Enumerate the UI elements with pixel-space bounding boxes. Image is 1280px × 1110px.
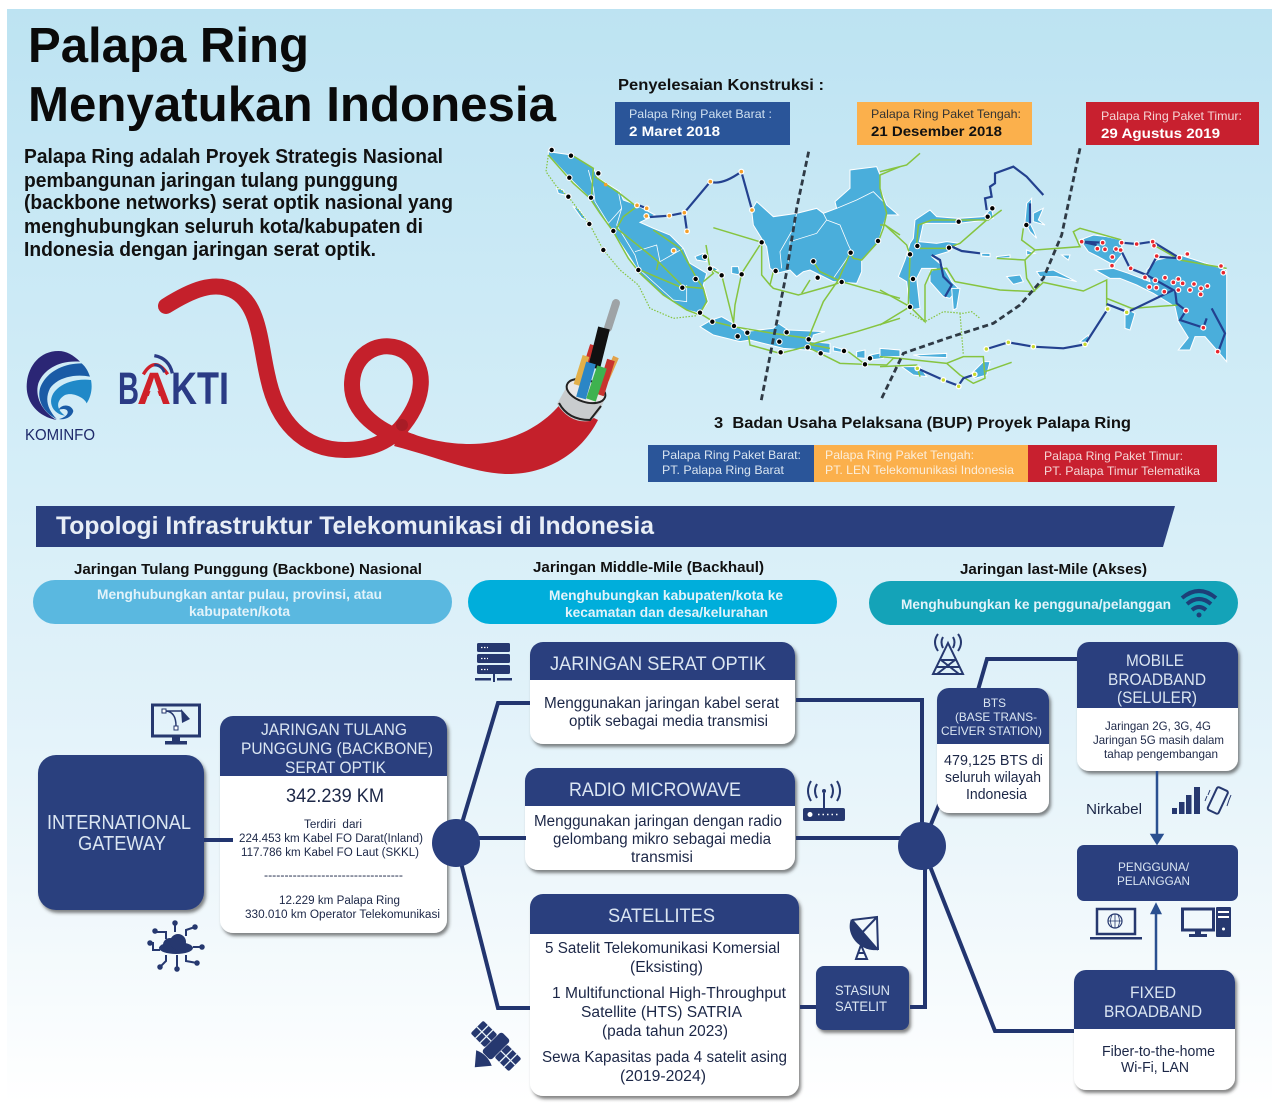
logo: Kominfo: KOMINFO [25,427,95,444]
box: satellite station: STASIUN [835,982,890,998]
heading: three implementing companies: 3 Badan Usaha Pelaksana (BUP) Proyek Palapa Ring [714,415,1131,432]
box: fixed broadband: Wi-Fi, LAN [1121,1060,1189,1076]
box: satellites: SATELLITES [608,906,715,927]
box: user [1077,845,1238,901]
box: mobile broadband: (SELULER) [1117,688,1197,707]
box: BTS [937,688,1049,813]
box: radio microwave: RADIO MICROWAVE [569,780,741,801]
icon: vibrating phone [1205,787,1231,814]
box: user: PENGGUNA/ [1118,860,1190,874]
completion box: west package [615,102,790,145]
box: backbone fibre: JARINGAN TULANG [261,720,407,739]
box: mobile broadband: BROADBAND [1108,670,1206,689]
arrow: fixed broadband to user [1152,905,1160,970]
box: fibre optic network [530,642,795,744]
logo: BAKTI [118,356,229,414]
box: backbone fibre: PUNGGUNG (BACKBONE) [241,739,433,758]
icon: cell tower [933,634,963,674]
column: backbone: kabupaten/kota [189,603,290,619]
BUP box: west: PT. Palapa Ring Barat [662,463,785,477]
box: BTS: Indonesia [966,787,1028,803]
box: fixed broadband: FIXED [1130,983,1176,1002]
BUP box: east: PT. Palapa Timur Telematika [1044,464,1200,478]
completion box: east package: Palapa Ring Paket Timur: [1101,109,1242,123]
icon: satellite [456,1017,525,1086]
box: mobile broadband [1077,642,1238,771]
box: fibre optic network: optik sebagai media transmisi [569,713,768,730]
BUP box: west [648,445,814,482]
box: BTS: 479,125 BTS di [944,753,1043,769]
box: BTS: BTS [983,696,1006,710]
connector lines [456,659,1077,1031]
box: satellites [530,894,799,1096]
box: international gateway: GATEWAY [78,833,166,855]
box: fixed broadband [1074,970,1235,1090]
section banner: Topologi Infrastruktur Telekomunikasi di Indonesia [56,512,655,540]
title: Palapa Ring [28,19,309,73]
box: backbone fibre: 224.453 km Kabel FO Darat(Inland) [239,833,423,845]
logo: BAKTI: B [118,363,139,414]
column: backbone [33,561,452,624]
intro paragraph: (backbone networks) serat optik nasional yang [24,192,453,214]
BUP box: east [1028,445,1217,482]
intro paragraph: Palapa Ring adalah Proyek Strategis Nasional [24,146,443,168]
box: satellites: (pada tahun 2023) [602,1023,728,1040]
column: last-mile: Menghubungkan ke pengguna/pelanggan [901,596,1171,612]
box: radio microwave: Menggunakan jaringan dengan radio [534,813,782,830]
box: backbone fibre: 330.010 km Operator Telekomunikasi [245,909,440,921]
arrow: mobile broadband to user [1152,771,1162,843]
box: satellites: 5 Satelit Telekomunikasi Komersial [545,940,780,957]
icon: wifi router [803,781,845,821]
icon: satellite dish [850,917,878,959]
icon: desktop computer [1182,907,1231,937]
box: international gateway [38,755,204,910]
fibre optic cable illustration [166,286,616,474]
box: backbone fibre: 117.786 km Kabel FO Laut (SKKL) [241,847,419,859]
column: middle-mile: Menghubungkan kabupaten/kota ke [549,587,783,603]
box: international gateway: INTERNATIONAL [47,812,191,834]
box: mobile broadband: Jaringan 5G masih dalam [1093,733,1224,747]
logo: BAKTI: KTI [171,363,229,414]
box: mobile broadband: tahap pengembangan [1104,747,1218,761]
box: fixed broadband: BROADBAND [1104,1002,1202,1021]
hub: backbone [432,819,480,867]
box: backbone fibre: 12.229 km Palapa Ring [279,895,400,907]
box: fibre optic network: Menggunakan jaringan kabel serat [544,695,780,712]
icon: monitor with vector tool [152,705,200,744]
BUP box: east: Palapa Ring Paket Timur: [1044,449,1183,463]
BUP box: central [814,445,1028,482]
box: backbone fibre: 342.239 KM [286,786,384,807]
BUP box: central: PT. LEN Telekomunikasi Indonesia [825,463,1014,477]
box: satellites: Satellite (HTS) SATRIA [581,1004,743,1021]
box: backbone fibre: Terdiri dari [304,819,362,831]
completion box: central package: Palapa Ring Paket Tengah: [871,107,1021,121]
heading: construction completion: Penyelesaian Konstruksi : [618,77,824,94]
box: satellites: (Eksisting) [630,959,703,976]
connector: gateway to backbone [204,838,233,842]
logo: Kominfo [25,351,95,444]
completion box: west package: Palapa Ring Paket Barat : [629,107,772,121]
map of Indonesia with Palapa Ring network [546,148,1227,403]
title: Menyatukan Indonesia [28,78,557,132]
completion box: east package [1086,102,1259,145]
column: middle-mile: kecamatan dan desa/kelurahan [565,604,768,620]
intro paragraph: pembangunan jaringan tulang punggung [24,170,398,192]
box: backbone fibre [220,716,447,933]
completion box: central package: 21 Desember 2018 [871,123,1002,139]
column: middle-mile [468,559,837,624]
box: radio microwave: transmisi [631,849,693,866]
box: satellites: (2019-2024) [620,1068,706,1085]
BUP box: central: Palapa Ring Paket Tengah: [825,448,974,462]
box: BTS: CEIVER STATION) [941,724,1042,738]
box: radio microwave: gelombang mikro sebagai media [553,831,771,848]
intro paragraph: menghubungkan seluruh kota/kabupaten di [24,216,423,238]
box: user: PELANGGAN [1117,874,1190,888]
box: fibre optic network: JARINGAN SERAT OPTIK [550,654,766,675]
column: backbone: Menghubungkan antar pulau, provinsi, atau [97,586,382,602]
section banner [36,506,1175,547]
box: satellite station: SATELIT [835,998,887,1014]
BUP box: west: Palapa Ring Paket Barat: [662,448,801,462]
box: satellite station [816,966,909,1030]
box: satellites: Sewa Kapasitas pada 4 satelit asing [542,1049,787,1066]
intro paragraph: Indonesia dengan jaringan serat optik. [24,239,376,261]
box: radio microwave [525,768,795,870]
completion box: east package: 29 Agustus 2019 [1101,125,1220,141]
column: middle-mile: Jaringan Middle-Mile (Backhaul) [533,559,764,576]
icon: laptop [1090,909,1142,940]
box: BTS: (BASE TRANS- [955,710,1037,724]
column: last-mile [869,561,1238,625]
title [28,19,557,132]
icon: cloud network [150,923,202,969]
logo: BAKTI: A [137,363,171,414]
box: mobile broadband: MOBILE [1126,651,1184,670]
box: backbone fibre: SERAT OPTIK [285,758,387,777]
completion box: central package [857,102,1032,145]
box: BTS: seluruh wilayah [945,770,1041,786]
column: last-mile: Jaringan last-Mile (Akses) [960,561,1147,578]
completion box: west package: 2 Maret 2018 [629,123,720,139]
box: mobile broadband: Jaringan 2G, 3G, 4G [1105,719,1211,733]
box: backbone fibre: ---------------------------------- [264,870,403,882]
label: wireless: Nirkabel [1086,801,1142,818]
icon: signal bars [1172,787,1200,814]
icon: server rack [475,643,512,682]
column: backbone: Jaringan Tulang Punggung (Backbone) Nasional [74,561,422,578]
box: fixed broadband: Fiber-to-the-home [1102,1044,1215,1060]
intro paragraph [24,146,453,261]
box: satellites: 1 Multifunctional High-Throughput [552,985,787,1002]
hub: last-mile [898,822,946,870]
